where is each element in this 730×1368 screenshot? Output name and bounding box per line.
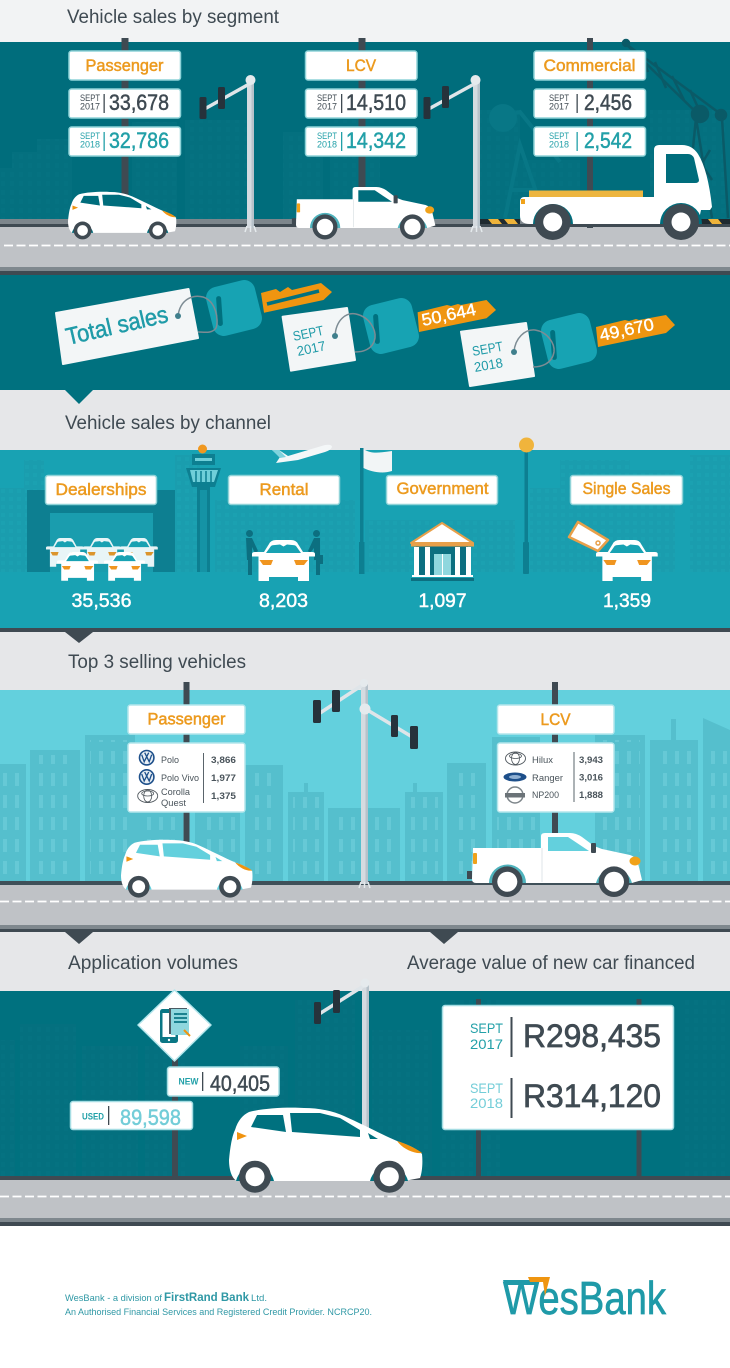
sign: commercial: 2,542 (584, 128, 632, 153)
sign: passenger top 3 (128, 682, 245, 864)
key: sept 2018: 2018 (473, 355, 504, 375)
key: sept 2018: SEPT (471, 339, 504, 359)
icon: airplane (272, 445, 332, 463)
key: total sales: Total sales (63, 301, 171, 351)
sign: LCV: 2018 (317, 140, 337, 150)
footer text: WesBank - a division of (65, 1293, 162, 1304)
road (0, 881, 730, 932)
sign: LCV top 3: 1,888 (579, 790, 603, 801)
billboard: average value: 2017 (470, 1036, 503, 1052)
icon: pickup truck (467, 833, 642, 897)
sign: passenger: SEPT (80, 131, 100, 142)
traffic light (314, 978, 370, 1144)
icon: flag (359, 448, 392, 574)
heading: average value: Average value of new car financed (407, 953, 695, 974)
icon: rental handshake car (246, 530, 323, 581)
label: single sales (570, 476, 682, 504)
icon: hatchback car (229, 1108, 422, 1193)
sign: LCV top 3: 3,943 (579, 755, 603, 766)
key: sept 2017: 50,644 (420, 300, 478, 330)
icon: ford logo (504, 772, 526, 782)
numbers: 1,097 (418, 591, 466, 612)
sign: commercial: Commercial (544, 56, 636, 75)
sign: passenger: 2018 (80, 140, 100, 150)
key: sept 2018 (461, 311, 675, 386)
sign: passenger top 3: Passenger (148, 710, 226, 728)
footer text (65, 1290, 372, 1318)
sign: commercial: 2017 (549, 102, 569, 112)
title: Vehicle sales by segment (67, 7, 280, 28)
section: top 3 selling vehicles (0, 632, 730, 932)
key: sept 2017 (283, 296, 496, 371)
panel: total sales keys (0, 275, 730, 391)
billboard: average value: SEPT (470, 1080, 503, 1096)
sign: LCV: SEPT (317, 93, 337, 104)
heading: application volumes: Application volumes (68, 953, 238, 974)
icon: pickup truck (292, 187, 435, 239)
sign: passenger top 3: 1,375 (211, 791, 237, 802)
sign: LCV top 3: LCV (540, 710, 571, 729)
numbers: 1,359 (603, 591, 651, 612)
label: government (386, 476, 498, 504)
traffic light 2 (424, 75, 482, 232)
numbers: 35,536 (72, 591, 132, 612)
label: dealerships: Dealerships (56, 480, 146, 499)
road (0, 219, 730, 275)
sign: new: 40,405 (210, 1071, 270, 1096)
sign: LCV: 14,510 (346, 90, 406, 115)
key: sept 2017: SEPT (292, 323, 325, 344)
sign: passenger top 3: 1,977 (211, 773, 236, 784)
billboard: average value: R314,120 (523, 1078, 661, 1114)
icon: government building (411, 523, 474, 581)
section: vehicle sales by segment (0, 0, 730, 275)
section: application volumes and average value (0, 932, 730, 1226)
sign: used: 89,598 (120, 1105, 181, 1130)
icon: control tower (186, 444, 221, 572)
icon: hatchback car (68, 192, 176, 239)
sign: passenger: 2017 (80, 102, 100, 112)
pointer (65, 632, 93, 643)
heading: Vehicle sales by channel (65, 413, 271, 434)
sign: new (168, 1067, 279, 1096)
footer text: An Authorised Financial Services and Registered Credit Provider. NCRCP20. (65, 1307, 372, 1318)
label: government: Government (396, 479, 489, 498)
pointers (65, 932, 458, 944)
sign: new: NEW (178, 1076, 199, 1088)
sign: LCV: 2017 (317, 102, 337, 112)
sign: passenger (69, 38, 180, 210)
label: rental (228, 476, 340, 504)
sign: commercial: SEPT (549, 131, 569, 142)
application post (172, 1050, 178, 1177)
sign: passenger: Passenger (86, 56, 164, 75)
key: sept 2018: 49,670 (598, 315, 656, 345)
section: vehicle sales by channel (0, 390, 730, 632)
key: sept 2017: 2017 (296, 338, 327, 359)
icon: pump jack (489, 104, 560, 218)
sign: passenger top 3: Polo Vivo (161, 773, 199, 784)
footer text: Ltd. (251, 1293, 267, 1304)
sign: LCV: SEPT (317, 131, 337, 142)
icon: street lamp (519, 438, 534, 574)
icon: hatchback car (121, 840, 253, 898)
billboard: average value (442, 999, 674, 1177)
sign: LCV (306, 38, 417, 198)
sign: commercial (534, 38, 646, 228)
sign: passenger top 3: 3,866 (211, 755, 236, 766)
icon: application diamond sign (138, 990, 211, 1061)
sign: passenger top 3: Corolla (161, 787, 191, 798)
icon: nissan logo (505, 787, 525, 803)
billboard: average value: SEPT (470, 1020, 503, 1036)
label: rental: Rental (260, 480, 308, 499)
sign: commercial: 2018 (549, 140, 569, 150)
sign: LCV top 3 (498, 682, 614, 852)
sign: passenger: SEPT (80, 93, 100, 104)
sign: LCV top 3: Hilux (532, 755, 553, 766)
sign: LCV: 14,342 (346, 128, 406, 153)
sign: commercial: SEPT (549, 93, 569, 104)
sign: passenger: 33,678 (109, 90, 169, 115)
key: total sales (56, 278, 332, 364)
footer text: FirstRand Bank (164, 1290, 249, 1304)
billboard: average value: 2018 (470, 1095, 503, 1111)
sign: LCV top 3: Ranger (532, 773, 563, 784)
numbers: 8,203 (259, 591, 308, 612)
icon: single sale car with tag (569, 522, 658, 581)
heading: Top 3 selling vehicles (68, 652, 246, 673)
pointer (65, 390, 93, 404)
sign: passenger top 3: Quest (161, 798, 186, 809)
sign: passenger: 32,786 (109, 128, 169, 153)
icon: commercial truck (520, 145, 712, 240)
sign: used: USED (82, 1112, 104, 1122)
label: single sales: Single Sales (582, 479, 670, 498)
sign: commercial: 2,456 (584, 90, 632, 115)
icon: crane (623, 40, 728, 218)
traffic light 1 (200, 75, 256, 232)
logo: WesBank: WesBank (503, 1272, 667, 1324)
sign: used (70, 1102, 192, 1130)
icon: dealership building (27, 490, 175, 581)
sign: LCV: LCV (346, 56, 377, 75)
sign: LCV top 3: 3,016 (579, 772, 603, 784)
sign: LCV top 3: NP200 (532, 790, 559, 801)
sign: passenger top 3: Polo (161, 755, 179, 766)
numbers (72, 591, 651, 612)
billboard: average value: R298,435 (523, 1018, 661, 1054)
road (0, 1176, 730, 1226)
label: dealerships (46, 476, 156, 504)
double traffic light (313, 679, 418, 888)
